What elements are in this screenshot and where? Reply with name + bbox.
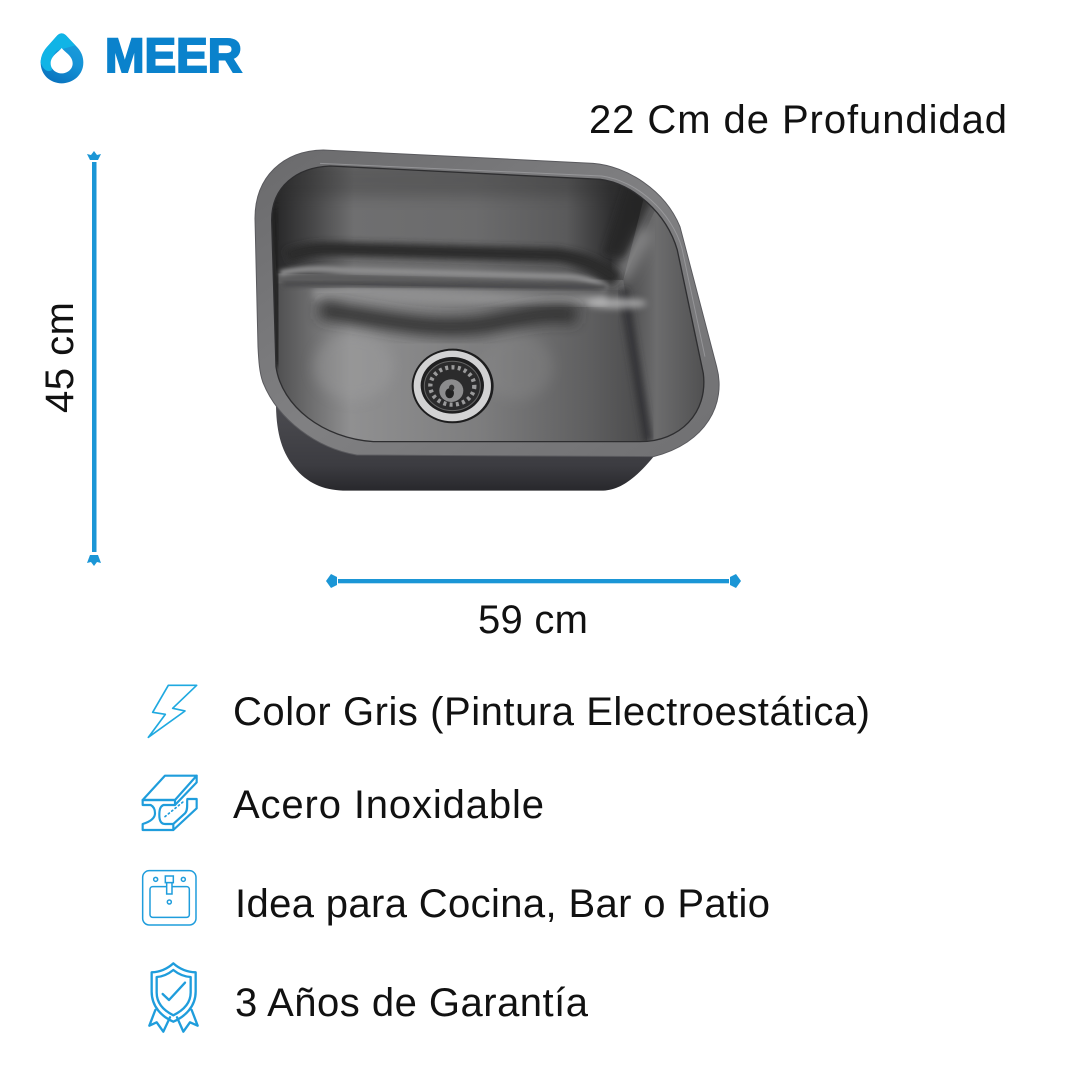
icon: lightning bolt	[148, 685, 197, 737]
logo wordmark: MEER	[105, 30, 242, 83]
bright floor patch	[313, 342, 344, 392]
inner lip line	[272, 166, 704, 442]
icon: shield badge	[149, 963, 198, 1032]
highlight	[587, 298, 647, 309]
logo: MEER	[41, 30, 242, 83]
floor	[273, 283, 650, 447]
feature: color	[148, 685, 870, 737]
sink body underside	[276, 407, 655, 491]
shadow band	[320, 310, 577, 327]
width label: 59 cm	[478, 598, 588, 642]
drain	[412, 349, 494, 423]
back wall	[273, 168, 643, 280]
right wall	[624, 211, 703, 440]
icon: sink	[143, 871, 196, 925]
height label: 45 cm	[38, 302, 82, 413]
icon: water drop	[41, 33, 83, 83]
feature: usage	[143, 871, 770, 926]
sink photo	[255, 150, 719, 491]
arrow: height dimension	[87, 151, 101, 566]
feature: material	[143, 776, 544, 830]
feature text: Idea para Cocina, Bar o Patio	[235, 882, 770, 926]
icon: steel beam	[143, 776, 197, 830]
feature: warranty	[149, 963, 589, 1032]
depth label: 22 Cm de Profundidad	[589, 98, 1007, 142]
sink rim	[255, 150, 719, 457]
left wall shadow	[273, 207, 277, 367]
feature text: Color Gris (Pintura Electroestática)	[233, 690, 870, 734]
arrow: width dimension	[326, 574, 741, 588]
sink basin	[267, 160, 713, 447]
feature text: 3 Años de Garantía	[235, 981, 589, 1025]
feature text: Acero Inoxidable	[233, 783, 544, 827]
ridge	[287, 249, 617, 280]
